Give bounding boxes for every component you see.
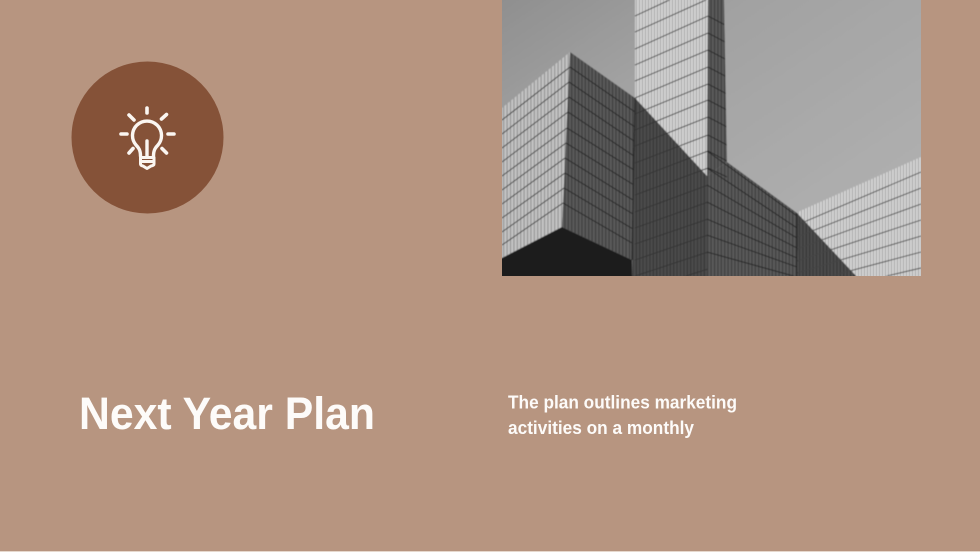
left building lit face xyxy=(502,52,570,258)
right building shadow xyxy=(797,213,858,278)
central shadowed block xyxy=(632,98,708,278)
description text xyxy=(508,392,737,438)
bottom edge line xyxy=(0,551,980,552)
tower side xyxy=(707,0,727,176)
middle block xyxy=(707,162,798,278)
building edges xyxy=(632,98,797,278)
sky xyxy=(500,0,923,278)
description text: activities on a monthly xyxy=(508,417,695,438)
right building lit face xyxy=(797,156,923,278)
tower lit face xyxy=(635,0,708,176)
badge circle xyxy=(72,62,224,214)
course lines xyxy=(502,0,921,297)
icon: light bulb xyxy=(121,108,174,168)
icon badge: light bulb xyxy=(72,62,224,214)
dark base xyxy=(500,227,632,278)
photo: black and white building xyxy=(500,0,923,297)
description text: The plan outlines marketing xyxy=(508,392,737,412)
title: Next Year Plan xyxy=(79,388,375,439)
left building shaded face xyxy=(562,52,635,260)
